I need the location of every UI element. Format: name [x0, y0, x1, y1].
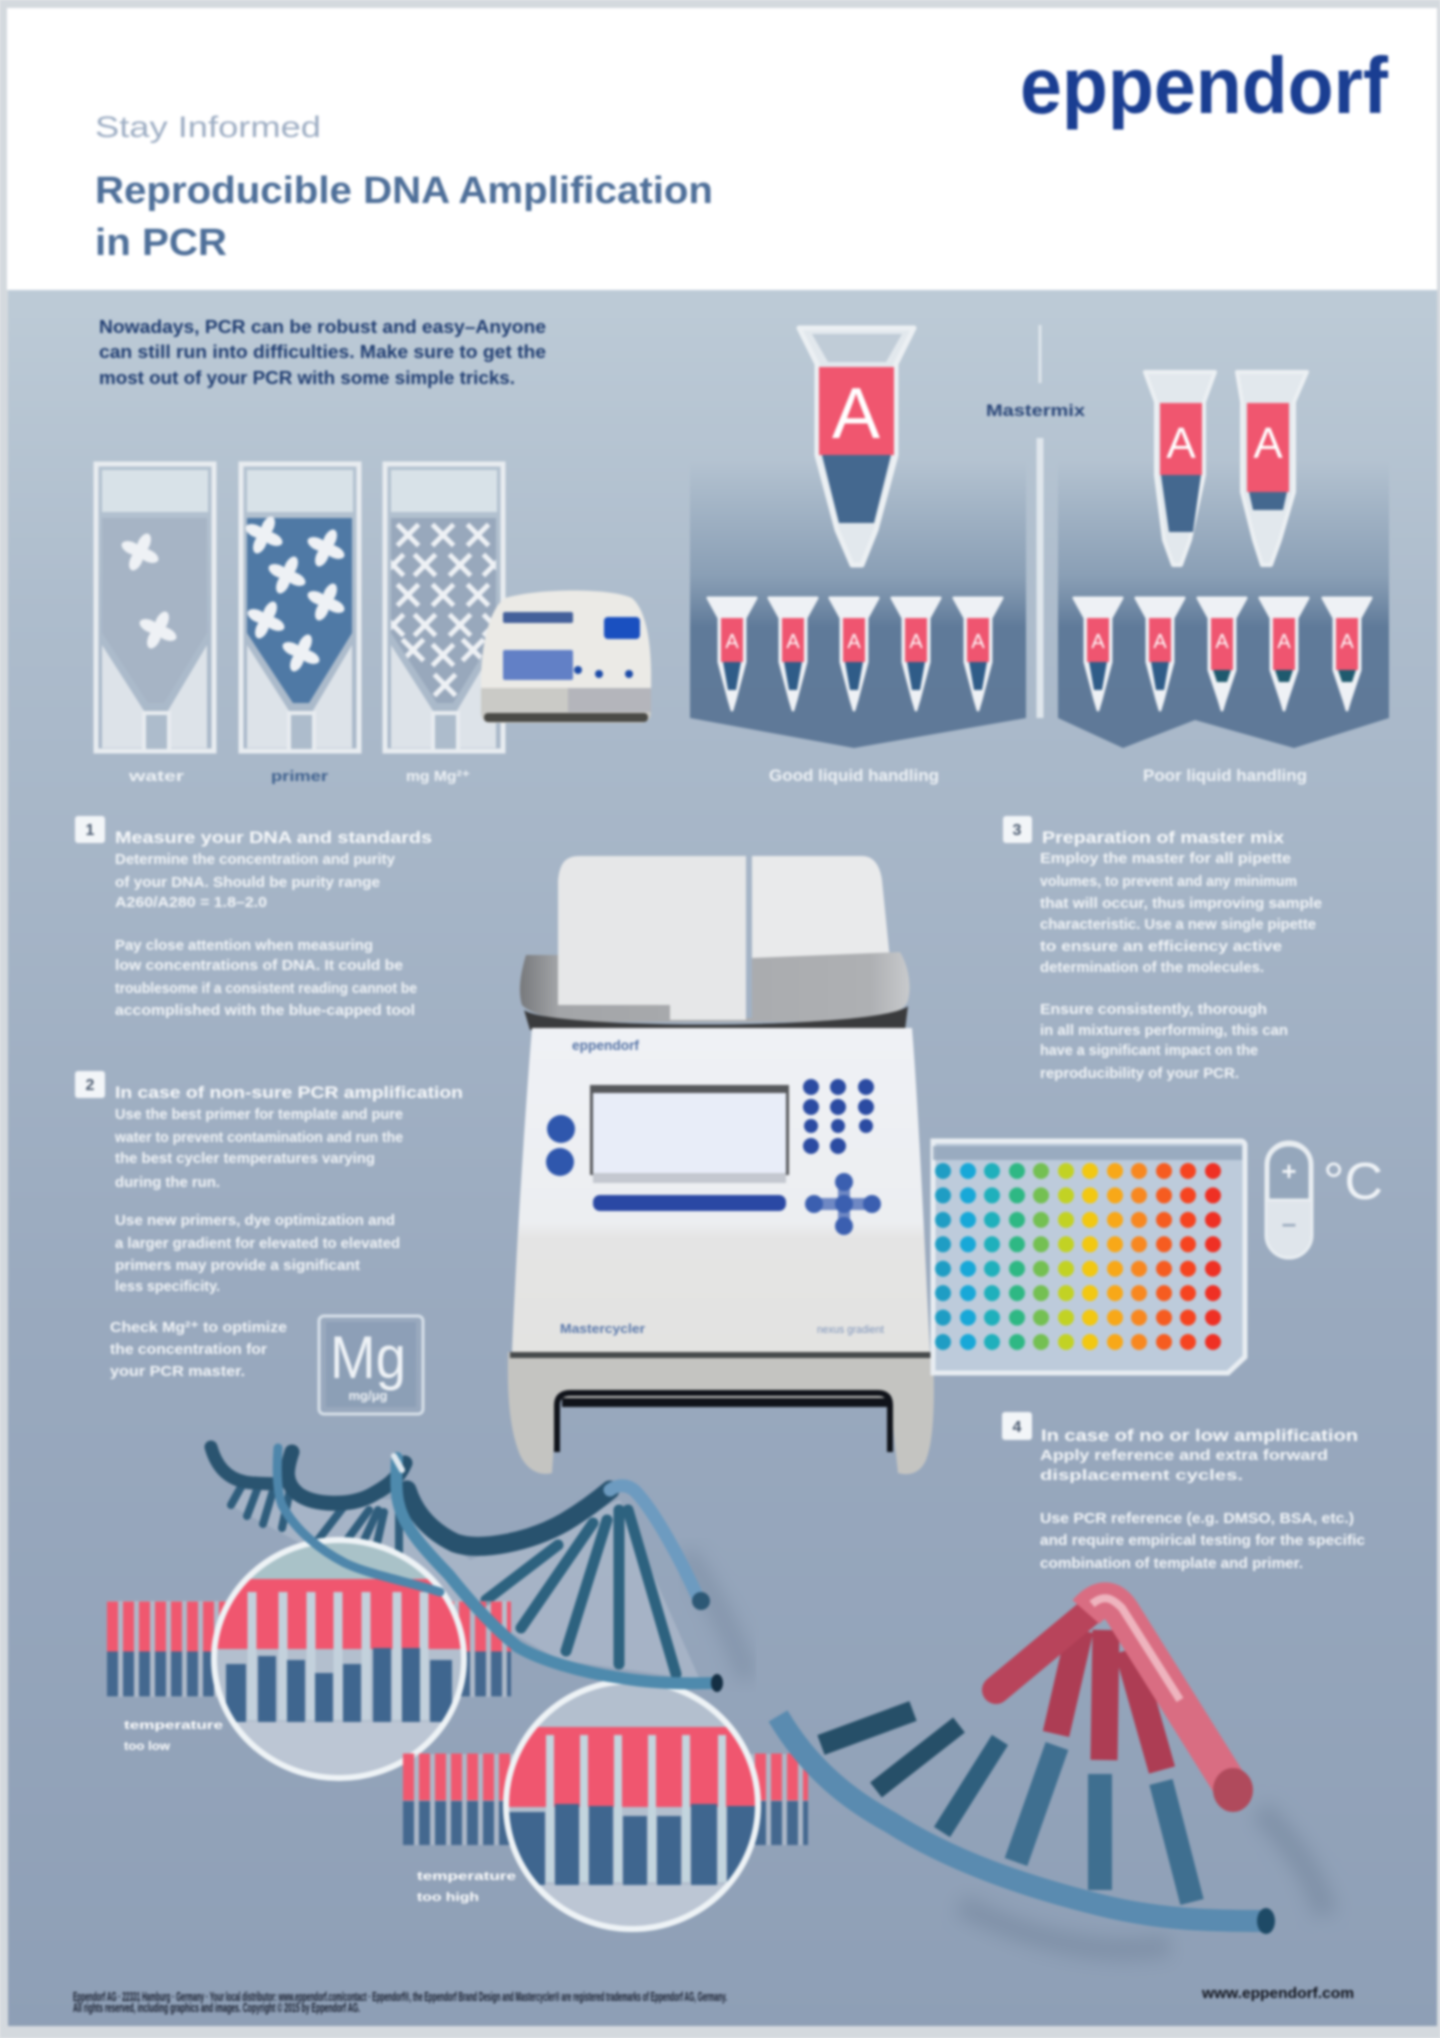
- footer url: www.eppendorf.com: [1201, 1985, 1354, 2002]
- step 2 text block: Check Mg²⁺ to optimize: [110, 1319, 287, 1336]
- step 4 text block: Apply reference and extra forward: [1040, 1447, 1328, 1464]
- step 1 text block: [75, 816, 432, 1019]
- step 3 text block: volumes, to prevent and any minimum: [1040, 873, 1297, 890]
- step 1 text block: accomplished with the blue-capped tool: [115, 1002, 415, 1019]
- step 1 text block: Pay close attention when measuring: [115, 937, 373, 954]
- heading 4: In case of no or low amplification: [1041, 1426, 1358, 1445]
- step 2 text block: Use the best primer for template and pure: [115, 1106, 403, 1123]
- small tubes row: poor: A: [1277, 631, 1291, 653]
- caption: too high: too high: [417, 1890, 479, 1904]
- pink rungs: [1056, 1630, 1162, 1770]
- icon: temperature plus/minus control: [1266, 1142, 1312, 1258]
- small tubes row: good: A: [725, 631, 739, 653]
- tube one: [1145, 372, 1215, 565]
- step 2 text block: primers may provide a significant: [115, 1257, 360, 1274]
- base: [508, 1352, 934, 1474]
- small tubes row: poor: A: [1153, 631, 1167, 653]
- direction pad: [805, 1173, 881, 1235]
- step 3 text block: [1003, 816, 1322, 1082]
- medium tubes pair: [1145, 372, 1307, 565]
- icon: Mg element box: mg/μg: [348, 1388, 388, 1403]
- small tubes row: poor: A: [1091, 631, 1105, 653]
- tube two: A: [1253, 419, 1283, 468]
- step 3 text block: Ensure consistently, thorough: [1040, 1001, 1267, 1018]
- labels of the columns: [128, 768, 470, 785]
- small tubes row: poor: A: [1215, 631, 1229, 653]
- upper helix front strand over the magnifier: [277, 1448, 723, 1692]
- large tube: master mix A: A: [832, 374, 880, 454]
- screen: [590, 1085, 789, 1183]
- large tube: master mix A: [799, 328, 914, 565]
- helix shadow: [690, 1560, 745, 1670]
- kicker: Stay Informed: [95, 111, 321, 144]
- small tubes row: good: [708, 598, 1002, 710]
- small tubes row: good: A: [909, 631, 923, 653]
- thermocycler instrument: [508, 856, 934, 1474]
- lid: [558, 856, 890, 1015]
- icon: temperature plus/minus control: +: [1281, 1156, 1297, 1186]
- icon: Mg element box: Mg: [330, 1324, 406, 1391]
- left round buttons: [546, 1115, 575, 1176]
- sequence strip: too low: [107, 1601, 511, 1697]
- step 4 text block: Use PCR reference (e.g. DMSO, BSA, etc.): [1040, 1510, 1354, 1527]
- helix rungs: [231, 1480, 399, 1572]
- small tubes row: poor: [1074, 598, 1371, 710]
- heading 2: In case of non-sure PCR amplification: [115, 1083, 463, 1102]
- softkey bar: [593, 1195, 786, 1211]
- 96-well gradient plate: [933, 1141, 1245, 1373]
- step 1 text block: Determine the concentration and purity: [115, 851, 396, 868]
- magnifier circle: too high: [500, 1681, 770, 1930]
- divider with mastermix label: Mastermix: [986, 401, 1086, 420]
- badge 2: 2: [86, 1077, 95, 1094]
- magnifier circle: too low: [210, 1540, 470, 1782]
- step 3 text block: Employ the master for all pipette: [1040, 850, 1291, 867]
- step 4 text block: and require empirical testing for the specific: [1040, 1532, 1365, 1549]
- icon: photometer device: [481, 590, 651, 723]
- gradient wells: [943, 1171, 1213, 1343]
- step 3 text block: to ensure an efficiency active: [1040, 938, 1282, 955]
- footer legal text: All rights reserved, including graphics and images. Copyright © 2015 by Eppendorf AG.: [73, 2000, 360, 2015]
- labels of the columns: primer: [271, 768, 328, 785]
- caption: too low: [124, 1718, 223, 1753]
- blue rungs: [821, 1711, 1000, 1832]
- labels of the columns: mg Mg²⁺: [406, 768, 470, 785]
- back strand one: [211, 1447, 278, 1484]
- model labels: Mastercycler: [560, 1321, 645, 1336]
- captions under tubes: [769, 766, 1307, 785]
- brand label: eppendorf: [572, 1037, 639, 1053]
- step 4 text block: displacement cycles.: [1040, 1467, 1243, 1484]
- base arch shadow: [557, 1393, 890, 1452]
- badge 2: [75, 1071, 105, 1098]
- small tubes row: good: A: [786, 631, 800, 653]
- step 3 text block: in all mixtures performing, this can: [1040, 1022, 1288, 1039]
- sequence strip: too high: [403, 1754, 808, 1845]
- step 3 text block: characteristic. Use a new single pipette: [1040, 916, 1316, 933]
- degree celsius label: °C: [1323, 1153, 1383, 1211]
- back strand three: [407, 1490, 610, 1546]
- tube two: [1237, 372, 1307, 565]
- step 2 text block: your PCR master.: [110, 1363, 245, 1380]
- text: Eppendorf AG · 22331 Hamburg · Germany · Your local distributor: www.eppendorf.com/contact · Eppendorf®, the Eppendorf Brand Design and Mastercycler® are registered trademarks of Eppendorf AG, Germany.: [73, 1989, 727, 2004]
- title: in PCR: [95, 222, 227, 264]
- step 2 text block: Use new primers, dye optimization and: [115, 1212, 395, 1229]
- step 2 text block: water to prevent contamination and run the: [114, 1129, 403, 1146]
- step 2 text block: during the run.: [115, 1174, 220, 1191]
- heading 3: Preparation of master mix: [1042, 828, 1285, 847]
- step 3 text block: determination of the molecules.: [1040, 959, 1264, 976]
- footer legal text: [73, 1989, 727, 2015]
- upper arm: [610, 1486, 699, 1600]
- badge 4: [1002, 1412, 1032, 1440]
- column: water: [96, 464, 214, 751]
- intro text: Nowadays, PCR can be robust and easy–Anyone: [99, 317, 546, 337]
- pink strand: [996, 1610, 1092, 1690]
- labels of the columns: water: [128, 768, 184, 785]
- panel: three reagent columns: [96, 464, 506, 751]
- small tubes row: good: A: [847, 631, 861, 653]
- header panel: [7, 8, 1437, 290]
- back strand two: [287, 1452, 405, 1503]
- step 4 text block: [1002, 1412, 1365, 1572]
- step 4 text block: combination of template and primer.: [1040, 1555, 1303, 1572]
- step 3 text block: have a significant impact on the: [1040, 1042, 1258, 1059]
- illustration: upper blue DNA helix: [211, 1447, 745, 1680]
- tube one: A: [1166, 419, 1196, 468]
- blue strand: [778, 1716, 1266, 1921]
- step 1 text block: of your DNA. Should be purity range: [115, 874, 380, 891]
- panel: good liquid handling backdrop: [690, 460, 1026, 748]
- intro text: most out of your PCR with some simple tricks.: [99, 368, 515, 388]
- badge 4: 4: [1013, 1419, 1022, 1436]
- lid handle band: [520, 952, 910, 1030]
- step 2 text block: a larger gradient for elevated to elevated: [115, 1235, 400, 1252]
- step 1 text block: low concentrations of DNA. It could be: [115, 957, 403, 974]
- small tubes row: good: A: [971, 631, 985, 653]
- caption: too low: temperature: [124, 1718, 223, 1732]
- panel: poor liquid handling backdrop: [1058, 460, 1389, 748]
- caption: too low: too low: [124, 1739, 171, 1753]
- captions under tubes: Good liquid handling: [769, 766, 939, 785]
- small tubes row: poor: A: [1340, 631, 1354, 653]
- eppendorf logo: eppendorf: [1020, 41, 1388, 130]
- step 3 text block: reproducibility of your PCR.: [1040, 1065, 1239, 1082]
- helix shadows: [960, 1810, 1325, 1949]
- badge 1: 1: [86, 822, 95, 839]
- column: mg: [381, 464, 506, 751]
- badge 3: 3: [1013, 822, 1022, 839]
- title: [95, 170, 713, 264]
- captions under tubes: Poor liquid handling: [1143, 766, 1307, 785]
- column: primer: [241, 464, 359, 751]
- title: Reproducible DNA Amplification: [95, 170, 713, 212]
- caption: too high: temperature: [417, 1869, 516, 1883]
- thermocycler instrument: nexus gradient: [817, 1324, 884, 1336]
- icon: temperature plus/minus control: –: [1282, 1208, 1296, 1238]
- step 1 text block: troublesome if a consistent reading cannot be: [115, 980, 417, 997]
- badge 3: [1003, 816, 1032, 843]
- haze between rungs: [230, 1490, 700, 1680]
- heading 1: Measure your DNA and standards: [115, 828, 432, 847]
- step 2 text block: less specificity.: [115, 1278, 220, 1295]
- step 1 text block: A260/A280 = 1.8–2.0: [115, 894, 267, 911]
- badge 1: [75, 816, 105, 843]
- step 2 text block: [75, 1071, 463, 1380]
- intro text: [99, 317, 546, 388]
- instrument body: [512, 1028, 930, 1352]
- step 3 text block: that will occur, thus improving sample: [1040, 895, 1322, 912]
- step 2 text block: the concentration for: [110, 1341, 267, 1358]
- caption: too high: [417, 1869, 516, 1904]
- icon: Mg element box: [319, 1316, 423, 1414]
- intro text: can still run into difficulties. Make sure to get the: [99, 342, 546, 362]
- illustration: lower DNA helix, blue and pink strands: [778, 1598, 1325, 1949]
- step 2 text block: the best cycler temperatures varying: [115, 1150, 375, 1167]
- keypad: [803, 1079, 874, 1154]
